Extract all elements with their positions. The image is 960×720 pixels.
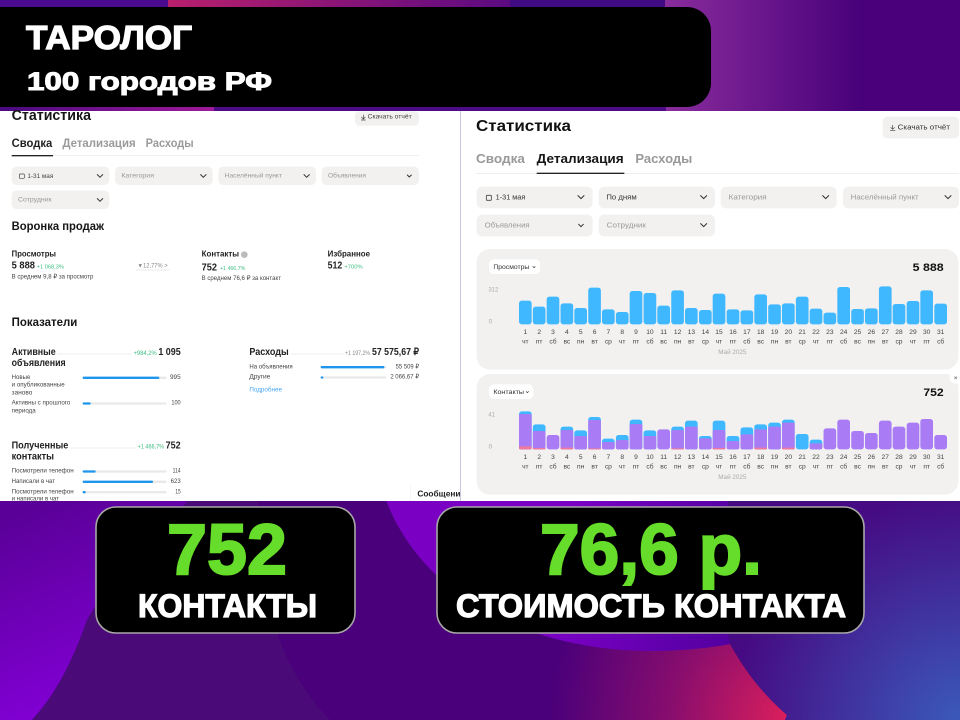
day labels: 23 [826,454,834,461]
block: active listings: 100 [171,399,181,406]
block: received contacts: и написали в чат [12,496,59,503]
day labels: 24 [840,454,848,461]
block: expenses: Другие [249,374,271,381]
heading: Статистика: Статистика [12,108,92,124]
title banner [0,7,711,107]
total views: 5 888 [913,262,944,274]
weekday labels: вт [785,463,792,470]
day labels: 10 [646,329,654,336]
weekday labels: вс [757,463,765,470]
subtitle: 100 городов РФ: 100 городов РФ [27,68,272,96]
weekday labels: пт [827,463,833,470]
axis labels: 312 [488,287,499,294]
close button: × [954,375,958,382]
day labels: 23 [826,329,834,336]
metric: Контакты: В среднем 76,6 ₽ за контакт [202,275,281,282]
dropdown: Просмотры [489,259,540,274]
block: active listings: заново [12,389,33,396]
day labels: 7 [606,329,610,336]
tabs: Расходы [635,152,692,166]
metric: Просмотры: 5 888 [12,261,35,272]
weekday labels: ср [702,338,709,345]
callout: contacts count: 752 [167,511,287,590]
day labels: 28 [895,329,903,336]
weekday labels: пт [536,338,542,345]
day labels [523,454,945,461]
button: download report [883,117,959,138]
day labels: 13 [688,329,695,336]
callout: cost per contact [437,507,864,633]
block: received contacts: контакты [12,452,54,463]
day labels: 12 [674,329,682,336]
weekday labels: пт [923,463,930,470]
filters: Категория [729,192,767,201]
tabs: Детализация [62,136,136,150]
day labels: 15 [715,329,723,336]
weekday labels: чт [619,463,625,470]
block: received contacts: 15 [175,488,181,495]
metric: Просмотры: +1 068,3% [37,265,64,271]
button: download report: Скачать отчёт [368,114,412,121]
chart: contacts per day [477,372,960,495]
block: expenses: 57 575,67 ₽ [372,347,420,358]
filters [477,187,959,236]
filters: 1-31 мая [27,173,54,180]
filters: 1-31 мая [496,193,525,202]
day labels: 3 [551,329,555,336]
block: active listings: объявления [12,358,66,369]
day labels: 30 [923,454,931,461]
metric: Просмотры [12,250,94,281]
metric: Контакты: Контакты [202,250,239,259]
block: active listings: Активны с прошлого [12,399,71,406]
weekday labels: вт [882,338,888,345]
weekday labels: пн [577,463,585,470]
weekday labels: вс [854,463,862,470]
callout: cost per contact: СТОИМОСТЬ КОНТАКТА [456,588,846,624]
total contacts: 752 [923,387,944,399]
weekday labels [522,337,944,345]
weekday labels: чт [813,463,819,470]
day labels: 2 [537,329,541,336]
axis labels [488,287,499,325]
weekday labels: вс [660,338,668,345]
day labels: 26 [868,454,875,461]
weekday labels: вт [688,338,695,345]
weekday labels: ср [895,338,903,345]
filters: Объявления [328,172,366,180]
funnel summary controls [12,108,419,282]
callout: contacts count [96,507,355,633]
day labels: 6 [593,329,597,336]
bars [519,286,947,324]
dropdown: Контакты: Контакты [493,389,524,396]
day labels: 31 [937,329,945,336]
day labels: 14 [702,329,709,336]
block: expenses: Подробнее [249,385,282,393]
day labels: 19 [771,329,779,336]
day labels: 21 [798,454,806,461]
day labels: 11 [660,454,667,461]
weekday labels: вт [591,338,598,345]
month label: Май 2025 [718,348,747,356]
weekday labels: пт [827,338,833,345]
block: active listings: и опубликованные [12,381,65,389]
filters [12,167,419,209]
day labels: 18 [757,329,765,336]
block: received contacts: Посмотрели телефон [12,488,74,495]
day labels: 8 [620,329,624,336]
weekday labels: ср [605,338,612,345]
day labels: 9 [634,329,638,336]
block: expenses: Расходы [249,347,289,358]
day labels: 25 [854,454,862,461]
metric: Контакты [202,250,281,282]
day labels: 13 [688,454,695,461]
button: download report [355,111,419,126]
weekday labels: пт [633,338,639,345]
chart: views per day [477,249,958,370]
weekday labels: чт [522,338,529,345]
day labels: 29 [909,454,917,461]
heading: Статистика: Статистика [476,118,572,135]
weekday labels: вс [563,338,571,345]
month label: Май 2025 [718,473,747,481]
block: active listings: +984,2% [134,351,157,357]
block: received contacts: 752 [166,441,181,452]
day labels: 1 [523,454,527,461]
weekday labels: чт [910,463,916,470]
weekday labels: пт [633,463,639,470]
weekday labels: пн [674,338,682,345]
block: expenses: 55 509 ₽ [396,363,419,370]
tabs: Сводка [476,152,526,166]
weekday labels: пн [771,463,778,470]
day labels: 21 [798,329,806,336]
callout: cost per contact: 76,6 р. [540,511,762,590]
weekday labels: чт [716,463,722,470]
block: expenses: +1 197,2% [345,351,371,357]
day labels: 22 [812,454,820,461]
day labels [523,329,945,336]
weekday labels: вс [757,338,765,345]
weekday labels: сб [937,462,944,470]
callout: contacts count: КОНТАКТЫ [138,588,317,624]
weekday labels: чт [910,338,916,345]
tabs: Расходы [146,136,194,150]
day labels: 17 [743,329,751,336]
chip: messages: Сообщения [417,489,465,499]
purple bars [519,414,947,449]
conversion link: ▼12,77% > [137,264,168,270]
block: received contacts [12,441,181,503]
weekday labels: чт [813,338,819,345]
filters: Сотрудник [607,221,647,230]
weekday labels: чт [522,463,529,470]
day labels: 16 [729,454,737,461]
day labels: 3 [551,454,555,461]
metric: Избранное: Избранное [328,250,371,259]
day labels: 17 [743,454,751,461]
block: expenses [249,347,420,393]
filters: Населённый пункт [851,192,919,201]
day labels: 1 [523,329,527,336]
weekday labels: сб [743,462,751,470]
day labels: 29 [909,329,917,336]
weekday labels: ср [799,338,806,345]
weekday labels: пн [868,338,875,345]
close button [950,372,960,384]
metric: Просмотры: Просмотры [12,250,56,259]
day labels: 5 [579,329,583,336]
tabs [476,152,959,174]
day labels: 30 [923,329,931,336]
day labels: 31 [937,454,945,461]
filters: Сотрудник [18,196,52,203]
weekday labels: сб [549,462,557,470]
day labels: 22 [812,329,820,336]
day labels: 20 [785,329,792,336]
block: active listings [12,347,181,414]
weekday labels: сб [549,337,557,345]
block: received contacts: Полученные [12,441,69,452]
weekday labels: ср [605,463,612,470]
day labels: 4 [565,329,569,336]
day labels: 18 [757,454,765,461]
metric: Просмотры: В среднем 9,8 ₽ за просмотр [12,274,94,281]
dropdown: Просмотры: Просмотры [493,264,530,271]
block: active listings: Активные [12,347,56,358]
day labels: 10 [646,454,654,461]
block: active listings: 1 095 [158,347,181,358]
chip: messages [410,485,465,501]
axis labels: 0 [489,318,493,325]
day labels: 24 [840,329,848,336]
heading: Воронка продаж: Воронка продаж [12,219,104,233]
day labels: 14 [702,454,709,461]
weekday labels: вт [688,463,695,470]
day labels: 16 [729,329,737,336]
day labels: 28 [895,454,903,461]
day labels: 7 [606,454,610,461]
day labels: 19 [771,454,779,461]
weekday labels: чт [716,338,722,345]
block: active listings: периода [12,407,36,414]
weekday labels: вт [591,463,598,470]
block: received contacts: +1 466,7% [138,444,165,450]
filters: Объявления [485,221,530,230]
weekday labels: сб [840,337,847,345]
tabs [12,136,419,156]
block: active listings: 995 [170,374,181,381]
day labels: 11 [660,329,667,336]
metric: Избранное [328,250,371,272]
metric: Избранное: 512 [328,261,343,272]
day labels: 25 [854,329,862,336]
heading: Показатели: Показатели [12,315,77,329]
weekday labels: пн [771,338,778,345]
weekday labels: пт [730,463,736,470]
axis labels [488,412,495,450]
weekday labels: ср [799,463,806,470]
day labels: 20 [785,454,792,461]
blue bars [519,411,822,449]
weekday labels: вс [660,463,668,470]
day labels: 4 [565,454,569,461]
block: received contacts: 114 [173,468,181,475]
block: received contacts: Посмотрели телефон [12,468,74,475]
filters: По дням [606,192,637,201]
day labels: 9 [634,454,638,461]
filters: Населённый пункт [225,172,282,180]
panel: left statistics screenshot [0,108,465,503]
weekday labels: сб [646,337,654,345]
weekday labels: сб [937,337,944,345]
tabs: Детализация [537,152,624,166]
day labels: 6 [593,454,597,461]
day labels: 5 [579,454,583,461]
weekday labels: сб [646,462,654,470]
weekday labels: пн [868,463,875,470]
day labels: 2 [537,454,541,461]
tabs: Сводка [12,136,53,150]
pink bar segments [519,446,795,449]
weekday labels: пт [730,338,736,345]
day labels: 8 [620,454,624,461]
block: expenses: 2 066,67 ₽ [390,374,419,381]
weekday labels: вс [563,463,571,470]
weekday labels [522,462,944,470]
day labels: 27 [882,329,889,336]
day labels: 15 [715,454,723,461]
weekday labels: вс [854,338,862,345]
button: download report: Скачать отчёт [898,123,950,132]
block: expenses: На объявления [249,362,293,370]
weekday labels: вт [882,463,888,470]
weekday labels: пт [923,338,930,345]
metric: Контакты: 752 [202,263,217,274]
weekday labels: сб [840,462,847,470]
day labels: 12 [674,454,682,461]
indicators section [12,315,465,503]
dropdown: Контакты [489,384,533,399]
weekday labels: ср [702,463,709,470]
weekday labels: пн [674,463,682,470]
metric: Избранное: +700% [344,265,363,271]
axis labels: 41 [488,412,495,419]
day labels: 27 [882,454,889,461]
block: active listings: Новые [12,374,31,381]
weekday labels: вт [785,338,792,345]
weekday labels: сб [743,337,751,345]
weekday labels: пн [577,338,585,345]
metric: Контакты: +1 466,7% [220,266,245,272]
weekday labels: чт [619,338,625,345]
block: received contacts: 623 [171,478,181,485]
title: ТАРОЛОГ: ТАРОЛОГ [26,19,192,56]
block: received contacts: Написали в чат [12,478,55,485]
day labels: 26 [868,329,875,336]
axis labels: 0 [489,443,493,450]
filters: Категория [121,173,154,180]
weekday labels: пт [536,463,542,470]
weekday labels: ср [895,463,903,470]
